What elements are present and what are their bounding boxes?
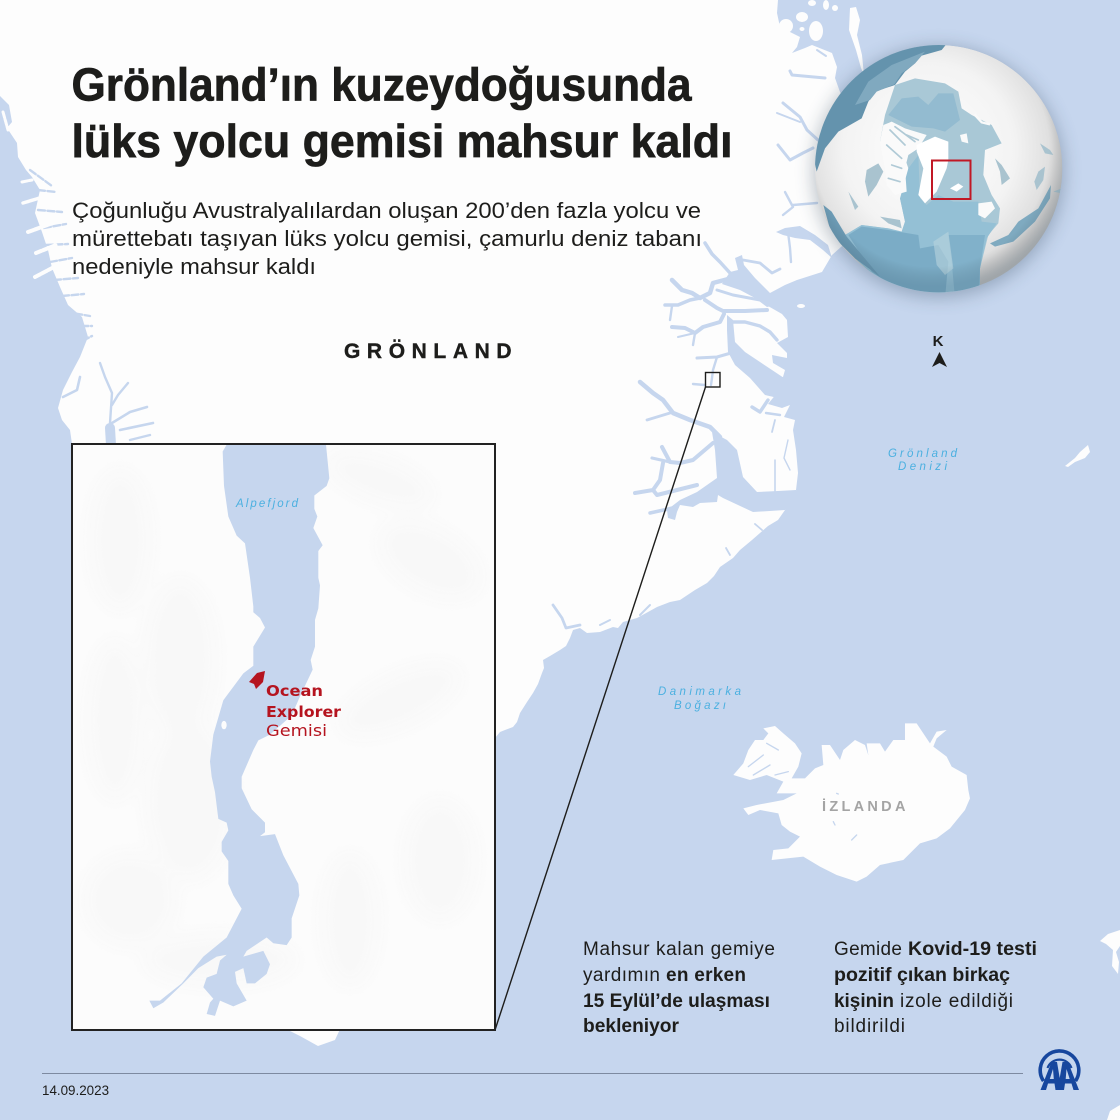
icon: ship marker xyxy=(249,671,265,689)
label: Ocean Explorer Gemisi: Ocean xyxy=(266,682,323,700)
icon: north arrow xyxy=(932,333,947,367)
title xyxy=(72,58,732,167)
text block: rescue expected: bekleniyor xyxy=(583,1016,680,1037)
text block: Covid-19 cases xyxy=(834,939,1037,1037)
label: Ocean Explorer Gemisi: Explorer xyxy=(266,703,341,721)
Pacific xyxy=(815,45,946,172)
subtitle xyxy=(72,198,702,279)
text block: Covid-19 cases: izole edildiği xyxy=(900,991,1013,1012)
Arctic land xyxy=(880,122,995,218)
locator globe xyxy=(808,38,1064,302)
text block: Covid-19 cases: kişinin xyxy=(834,991,894,1012)
subtitle: nedeniyle mahsur kaldı xyxy=(72,254,316,279)
title: lüks yolcu gemisi mahsur kaldı xyxy=(72,115,732,167)
text block: Covid-19 cases: bildirildi xyxy=(834,1016,905,1037)
upper band near globe xyxy=(776,226,832,258)
label: Ocean Explorer Gemisi: Gemisi xyxy=(266,721,327,740)
Alpefjord water xyxy=(149,445,329,1016)
text block: Covid-19 cases: Kovid-19 testi xyxy=(908,939,1037,960)
inset map panel xyxy=(72,440,495,1030)
island: Iceland xyxy=(733,723,970,882)
label: Grönland: GRÖNLAND xyxy=(344,340,518,363)
Arctic and Atlantic ocean xyxy=(846,78,1002,266)
Scoresby Sund xyxy=(667,432,805,520)
label: Danimarka Boğazı xyxy=(658,686,741,712)
Hudson Bay and inland seas xyxy=(848,143,1062,228)
date: 14.09.2023 xyxy=(42,1083,109,1098)
main channel xyxy=(727,315,790,398)
island: Jan Mayen xyxy=(1065,445,1090,467)
footer rule xyxy=(42,1073,1023,1074)
text block: rescue expected: yardımın xyxy=(583,965,660,986)
label: İzlanda: İZLANDA xyxy=(822,798,909,815)
label: Grönland Denizi: Denizi xyxy=(898,461,947,473)
icon: north arrow: K xyxy=(933,333,944,350)
text block: rescue expected xyxy=(583,939,775,1037)
label: Grönland Denizi: Grönland xyxy=(888,448,958,460)
label: Ocean Explorer Gemisi xyxy=(266,682,341,740)
locator rectangle and leader line xyxy=(495,372,720,1030)
south-west fjords xyxy=(100,363,112,423)
label: Danimarka Boğazı: Danimarka xyxy=(658,686,741,698)
south-west coastal skerries xyxy=(30,170,92,362)
title: Grönland’ın kuzeydoğusunda xyxy=(72,58,692,110)
text block: Covid-19 cases: pozitif çıkan birkaç xyxy=(834,965,1010,986)
text block: Covid-19 cases: Gemide xyxy=(834,939,902,960)
top fjord islands xyxy=(779,0,864,308)
text block: rescue expected: en erken xyxy=(666,965,746,986)
label: Alpefjord: Alpefjord xyxy=(235,498,299,510)
Caribbean rim xyxy=(823,205,880,277)
label: Danimarka Boğazı: Boğazı xyxy=(674,700,726,712)
text block: rescue expected: 15 Eylül’de ulaşması xyxy=(583,991,770,1012)
red locator box xyxy=(932,160,970,199)
island: Shetland xyxy=(1107,1105,1120,1120)
icon: AA logo xyxy=(1040,1051,1079,1090)
text block: rescue expected: Mahsur kalan gemiye xyxy=(583,939,775,960)
Kong Oscar fjord mouth xyxy=(722,255,800,307)
subtitle: mürettebatı taşıyan lüks yolcu gemisi, çamurlu deniz tabanı xyxy=(72,226,702,251)
label: Grönland Denizi xyxy=(888,448,958,473)
map: Greenland landmass and fjords xyxy=(0,0,864,1046)
subtitle: Çoğunluğu Avustralyalılardan oluşan 200’den fazla yolcu ve xyxy=(72,198,701,223)
island: Faroe xyxy=(1100,930,1120,974)
Mediterranean xyxy=(990,185,1051,247)
